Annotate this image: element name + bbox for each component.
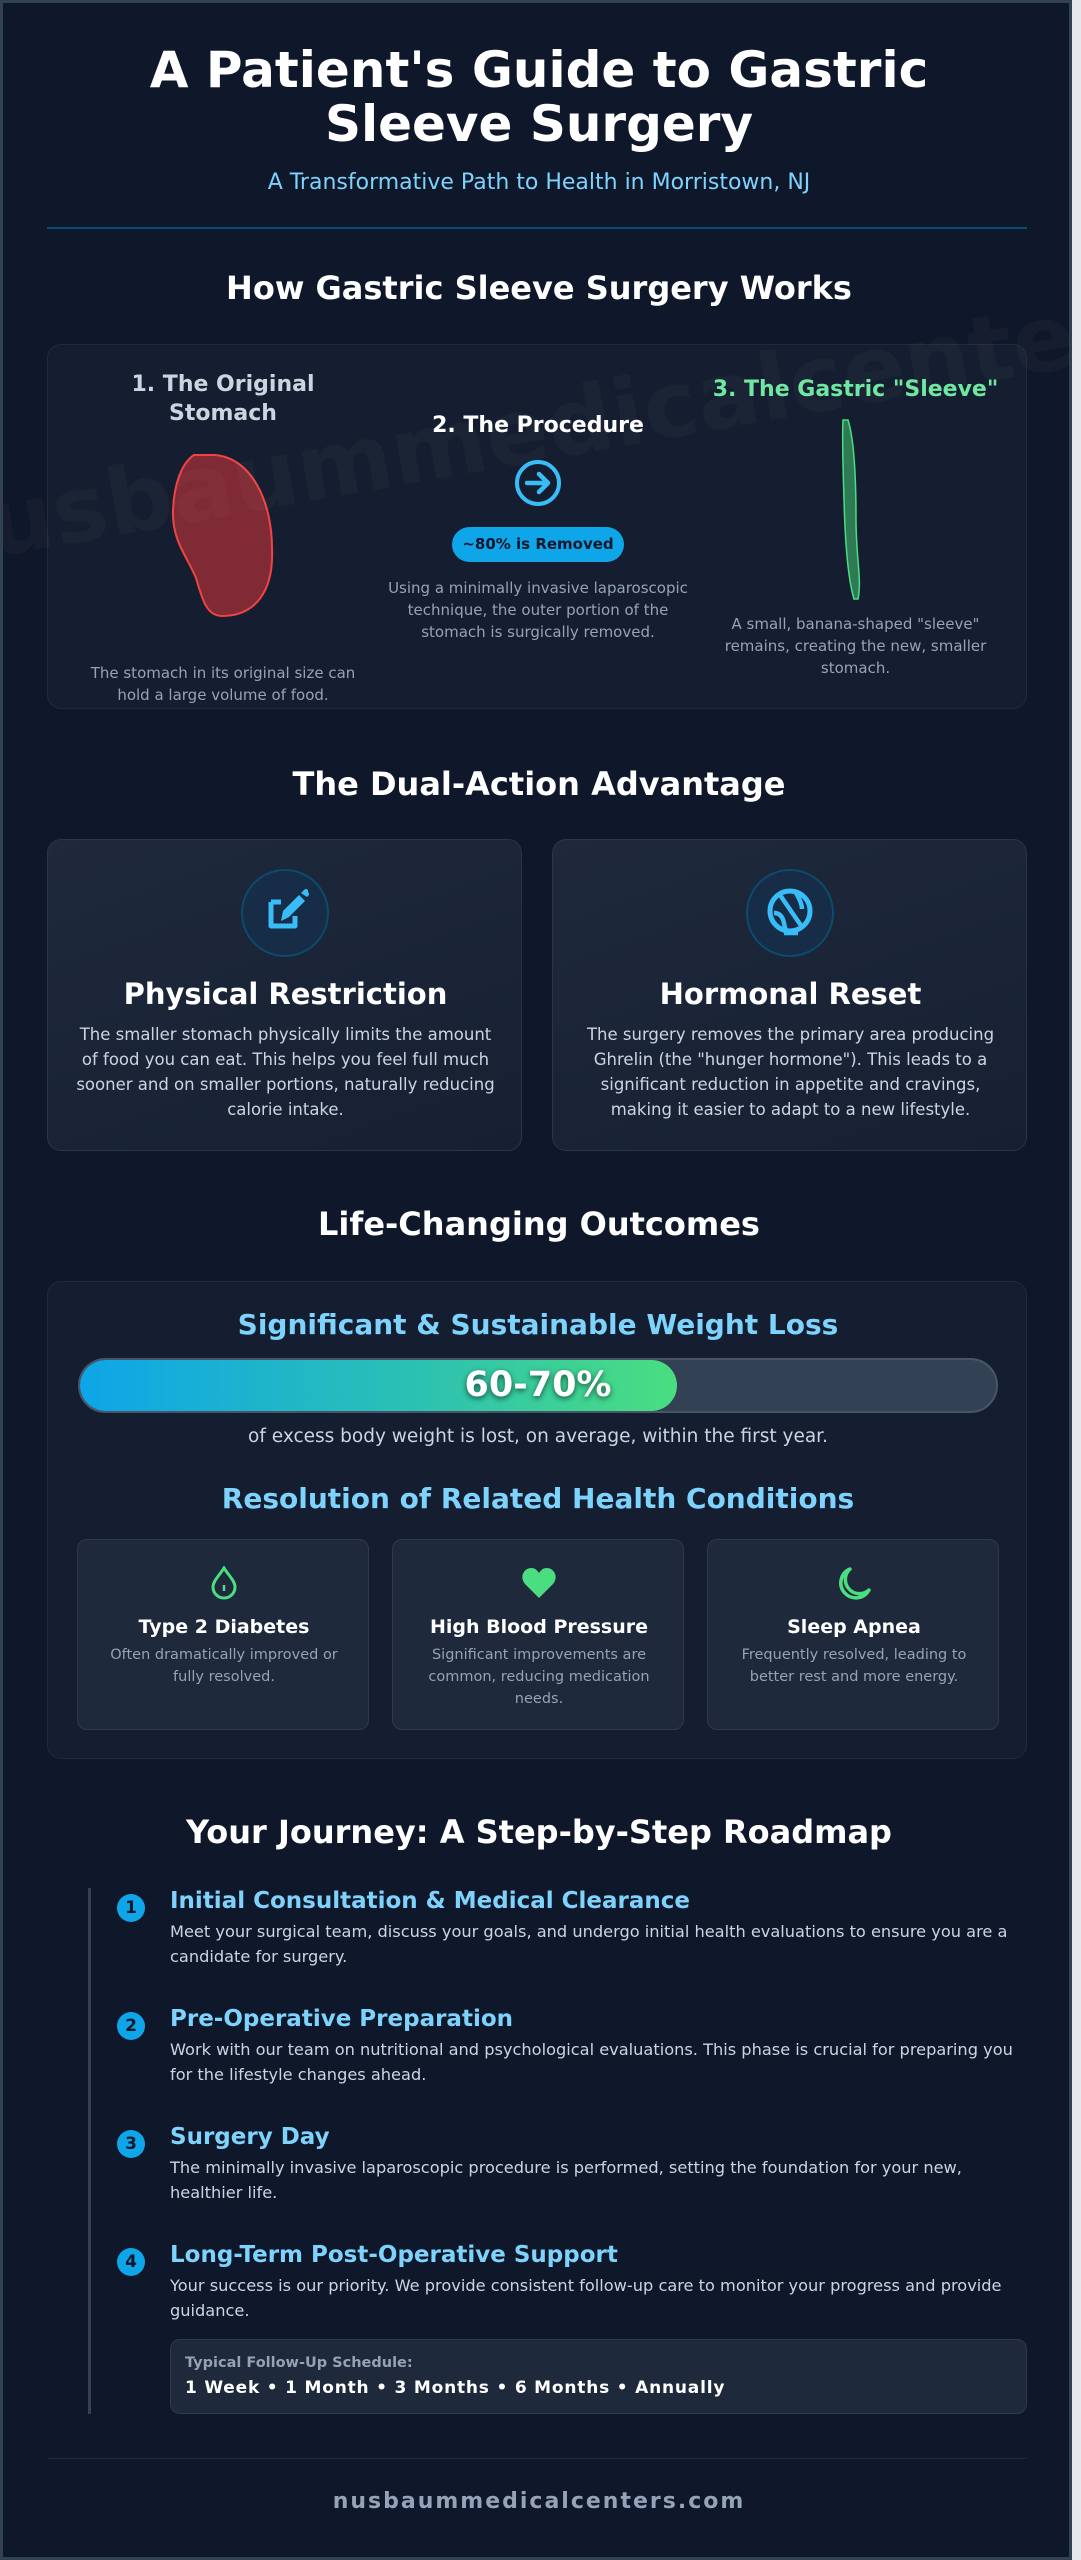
card: physical restriction: [47, 839, 522, 1151]
card: hormonal reset: [552, 839, 1027, 1151]
card: blood pressure: Significant improvements are common, reducing medication needs.: [428, 1647, 650, 1707]
card: blood pressure: [392, 1539, 684, 1730]
title: A Patient's Guide to Gastric: [150, 41, 928, 99]
step 2: 2: [125, 2016, 137, 2036]
card: diabetes: [77, 1539, 369, 1730]
subtitle: A Transformative Path to Health in Morristown, NJ: [268, 170, 810, 195]
step 2: [117, 2006, 1013, 2084]
icon: heart: [522, 1568, 556, 1598]
column 3: sleeve: 3. The Gastric "Sleeve": [713, 377, 998, 402]
step 1: Initial Consultation & Medical Clearance: [170, 1888, 690, 1914]
heading: how it works: How Gastric Sleeve Surgery Works: [226, 269, 852, 307]
heading: weight loss: Significant & Sustainable Weight Loss: [238, 1308, 838, 1341]
step 4: 4: [125, 2252, 137, 2272]
pill: 80% removed: ~80% is Removed: [462, 535, 614, 553]
column 1: original stomach: 1. The Original Stomach: [131, 372, 314, 426]
icon: hormone: [746, 869, 834, 957]
column 2: procedure: [388, 413, 688, 641]
bar chart: weight loss: 60-70%: [464, 1365, 612, 1405]
step 3: The minimally invasive laparoscopic procedure is performed, setting the foundation for your new, healthier life.: [170, 2158, 962, 2202]
title: [150, 41, 928, 153]
icon: pencil: [241, 869, 329, 957]
step 4: [117, 2242, 1027, 2414]
pill: 80% removed: [452, 527, 624, 562]
text: sleeve description: A small, banana-shaped "sleeve" remains, creating the new, smaller stomach.: [725, 615, 986, 677]
step 4: Your success is our priority. We provide consistent follow-up care to monitor your progress and provide guidance.: [170, 2276, 1002, 2320]
heading: roadmap: Your Journey: A Step-by-Step Roadmap: [186, 1813, 892, 1851]
title: Sleeve Surgery: [325, 95, 753, 153]
panel: outcomes: [47, 1281, 1027, 1759]
card: sleep apnea: [707, 1539, 999, 1730]
panel: how it works: [47, 344, 1027, 709]
text: caption: of excess body weight is lost, on average, within the first year.: [248, 1426, 828, 1447]
callout: follow-up schedule: 1 Week • 1 Month • 3 Months • 6 Months • Annually: [185, 2378, 725, 2398]
timeline: [88, 1888, 1027, 2414]
callout: follow-up schedule: [170, 2339, 1027, 2414]
icon: moon: [839, 1567, 871, 1600]
step 3: Surgery Day: [170, 2124, 330, 2150]
callout: follow-up schedule: Typical Follow-Up Schedule:: [185, 2355, 413, 2371]
card: sleep apnea: Frequently resolved, leading to better rest and more energy.: [742, 1647, 966, 1685]
footer: nusbaummedicalcenters.com: [333, 2489, 745, 2514]
text: original description: The stomach in its original size can hold a large volume of food.: [91, 664, 355, 704]
heading: dual action: The Dual-Action Advantage: [293, 765, 785, 803]
step 3: [117, 2124, 962, 2202]
icon: original stomach: [172, 454, 274, 617]
step 2: Work with our team on nutritional and psychological evaluations. This phase is crucial for preparing you for the lifestyle changes ahead.: [170, 2040, 1013, 2084]
step 1: Meet your surgical team, discuss your goals, and undergo initial health evaluations to ensure you are a candidate for surgery.: [170, 1922, 1007, 1966]
step 1: [117, 1888, 1007, 1966]
heading: outcomes: Life-Changing Outcomes: [318, 1205, 760, 1243]
heading: conditions: Resolution of Related Health Conditions: [222, 1482, 854, 1515]
icon: sleeve: [842, 419, 860, 600]
step 4: Long-Term Post-Operative Support: [170, 2242, 618, 2268]
card: diabetes: Type 2 Diabetes: [139, 1616, 309, 1638]
step 3: 3: [125, 2134, 137, 2154]
text: The surgery removes the primary area producing Ghrelin (the "hunger hormone"). This leads to a significant reduction in appetite and cravings, making it easier to adapt to a new lifestyle.: [587, 1025, 994, 1119]
card: diabetes: Often dramatically improved or fully resolved.: [110, 1647, 338, 1685]
step 1: 1: [125, 1898, 137, 1918]
card: blood pressure: High Blood Pressure: [430, 1616, 648, 1638]
text: The smaller stomach physically limits the amount of food you can eat. This helps you feel full much sooner and on smaller portions, naturally reducing calorie intake.: [76, 1025, 495, 1119]
step 2: Pre-Operative Preparation: [170, 2006, 513, 2032]
icon: arrow circle: [515, 460, 561, 506]
heading: hormonal reset: Hormonal Reset: [660, 977, 921, 1011]
icon: drop: [212, 1566, 236, 1600]
column 3: sleeve: [713, 377, 998, 677]
heading: physical restriction: Physical Restriction: [124, 977, 447, 1011]
card: sleep apnea: Sleep Apnea: [787, 1616, 921, 1638]
column 1: original stomach: [90, 372, 355, 704]
column 2: procedure: 2. The Procedure: [432, 413, 644, 438]
bar chart: weight loss: [78, 1358, 998, 1413]
text: procedure description: Using a minimally invasive laparoscopic technique, the outer portion of the stomach is surgically removed.: [388, 579, 688, 641]
